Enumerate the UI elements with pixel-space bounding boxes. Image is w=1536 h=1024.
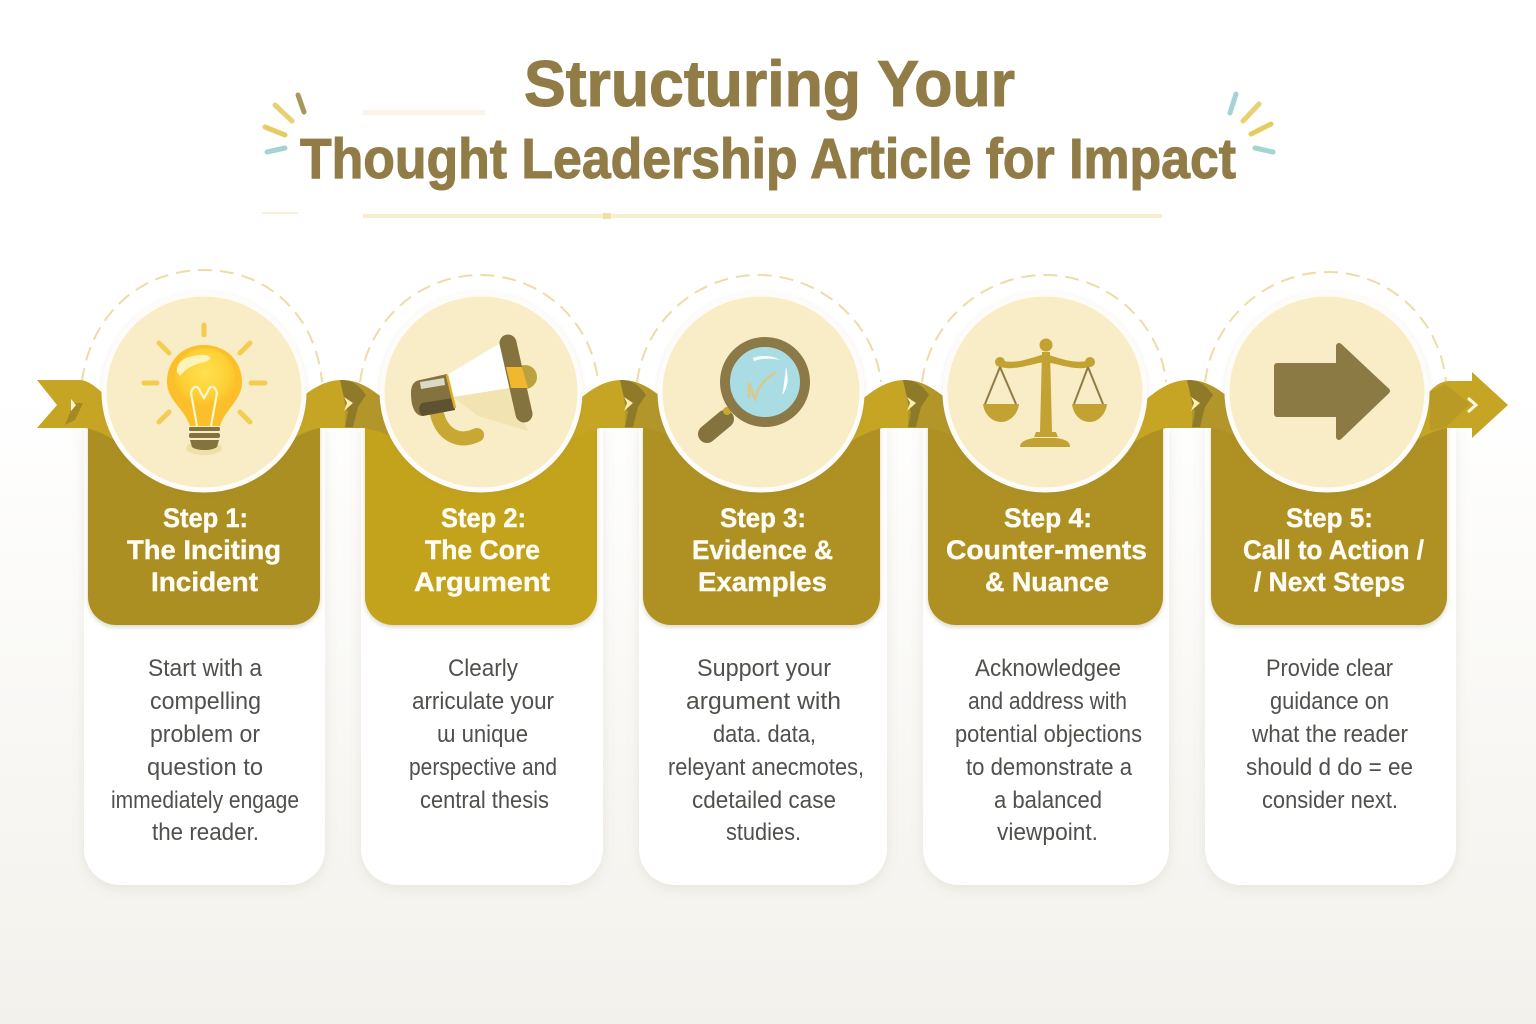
- step heading: Step 1:: [163, 503, 248, 533]
- step description: Acknowledgee: [975, 655, 1121, 682]
- step description: the reader.: [152, 819, 259, 846]
- step description: should d do = ee: [1246, 754, 1413, 781]
- header block: [88, 425, 320, 625]
- step heading: [692, 503, 833, 597]
- panel: step 4 card: [923, 425, 1169, 885]
- step description: [668, 655, 864, 846]
- step description: a balanced: [994, 787, 1102, 814]
- step description: central thesis: [420, 787, 549, 814]
- step description: [409, 655, 557, 814]
- icon: balance scales: [983, 338, 1107, 447]
- step description: potential objections: [955, 721, 1142, 748]
- step description: immediately engage: [111, 787, 299, 814]
- ribbon arch between step 1 and 2: [280, 380, 408, 447]
- title line 1: Structuring Your: [524, 47, 1015, 120]
- circle and icon: step 5 arrow: [1227, 294, 1427, 490]
- step description: cdetailed case: [692, 787, 836, 814]
- icon: right arrow: [1277, 346, 1387, 437]
- step description: perspective and: [409, 754, 557, 781]
- icon: lightbulb: [167, 345, 242, 455]
- circle and icon: step 3 magnifier: [660, 294, 862, 490]
- header block: [365, 425, 597, 625]
- step heading: Step 4:: [1004, 503, 1092, 533]
- ribbon connecting steps: [37, 372, 1508, 450]
- step description: [955, 655, 1142, 846]
- header block: [928, 425, 1163, 625]
- panel: step 1 card: [84, 425, 325, 885]
- step description: guidance on: [1270, 688, 1389, 715]
- ribbon tail: [37, 380, 130, 450]
- step description: Support your: [697, 655, 831, 682]
- step description: what the reader: [1251, 721, 1408, 748]
- step description: compelling: [150, 688, 261, 715]
- step heading: Argument: [414, 567, 550, 597]
- icon: lightbulb rays: [144, 325, 265, 422]
- step heading: [127, 503, 281, 597]
- circle and icon: step 2 megaphone: [382, 294, 580, 490]
- panel: step 3 card: [639, 425, 887, 885]
- ribbon arch between step 4 and 5: [1127, 380, 1255, 447]
- step description: arriculate your: [412, 688, 554, 715]
- ribbon arrowhead: [1405, 372, 1508, 447]
- card body: [639, 425, 887, 885]
- step description: Clearly: [448, 655, 518, 682]
- card body: [84, 425, 325, 885]
- panel: step 5 card: [1205, 425, 1456, 885]
- step description: ɯ unique: [437, 721, 528, 748]
- step description: studies.: [726, 819, 801, 846]
- right sparkle rays: [1230, 94, 1273, 152]
- step heading: / Next Steps: [1254, 567, 1405, 597]
- step description: releyant anecmotes,: [668, 754, 864, 781]
- step heading: Step 3:: [720, 503, 806, 533]
- step description: viewpoint.: [997, 819, 1098, 846]
- title underline: [262, 110, 1162, 219]
- step heading: [414, 503, 550, 597]
- step description: consider next.: [1262, 787, 1398, 814]
- title line 2: Thought Leadership Article for Impact: [300, 127, 1236, 191]
- step heading: Evidence &: [692, 535, 833, 565]
- header block: [643, 425, 880, 625]
- step description: question to: [147, 754, 263, 781]
- step heading: & Nuance: [985, 567, 1109, 597]
- card body: [923, 425, 1169, 885]
- icon: megaphone: [411, 342, 537, 438]
- step heading: [1243, 503, 1424, 597]
- title block: [262, 47, 1273, 219]
- step description: Provide clear: [1266, 655, 1393, 682]
- step description: and address with: [968, 688, 1127, 715]
- circle and icon: step 1 lightbulb: [104, 294, 304, 490]
- step description: [1246, 655, 1413, 814]
- step description: problem or: [150, 721, 260, 748]
- panel: step 2 card: [361, 425, 603, 885]
- step description: to demonstrate a: [966, 754, 1133, 781]
- ribbon arch between step 3 and 4: [843, 380, 971, 447]
- circle and icon: step 4 scales: [945, 294, 1145, 490]
- card body: [361, 425, 603, 885]
- step heading: Step 5:: [1286, 503, 1373, 533]
- step heading: The Inciting: [127, 535, 281, 565]
- step heading: The Core: [425, 535, 540, 565]
- step description: data. data,: [713, 721, 816, 748]
- step description: Start with a: [148, 655, 263, 682]
- icon: magnifying glass: [707, 342, 805, 434]
- header block: [1211, 425, 1447, 625]
- step description: [111, 655, 299, 846]
- dashed halo arcs: [82, 270, 1446, 382]
- step heading: Incident: [151, 567, 258, 597]
- step heading: Call to Action /: [1243, 535, 1424, 565]
- step heading: Counter-ments: [946, 535, 1147, 565]
- step heading: Step 2:: [441, 503, 526, 533]
- step heading: [946, 503, 1147, 597]
- ribbon arch between step 2 and 3: [560, 380, 688, 447]
- step heading: Examples: [698, 567, 827, 597]
- step description: argument with: [686, 688, 841, 715]
- card body: [1205, 425, 1456, 885]
- left sparkle rays: [265, 95, 304, 152]
